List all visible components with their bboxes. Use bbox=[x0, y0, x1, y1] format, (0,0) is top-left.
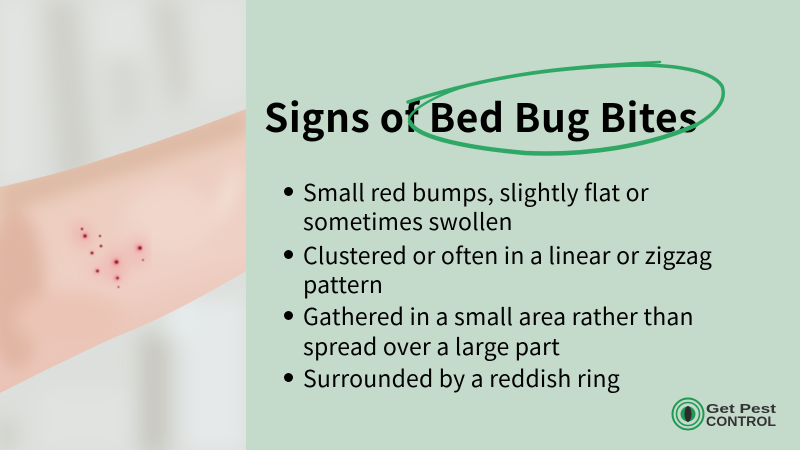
bullet 1 bbox=[284, 187, 293, 196]
title: Signs of Bed Bug Bites bbox=[264, 88, 698, 144]
logo text: CONTROL bbox=[706, 414, 776, 429]
logo: Get Pest Control bbox=[672, 398, 777, 430]
bullet 2 bbox=[284, 250, 293, 259]
bullet 2 text: Clustered or often in a linear or zigzag bbox=[303, 237, 712, 271]
bullet list bbox=[284, 174, 712, 394]
bullet 3 text continued: spread over a large part bbox=[303, 328, 560, 362]
hand-drawn green ellipse around title bbox=[406, 60, 726, 156]
logo text bbox=[706, 401, 777, 429]
arm bbox=[0, 109, 246, 393]
bullet 4 bbox=[284, 373, 293, 382]
bullet 4 text: Surrounded by a reddish ring bbox=[303, 360, 620, 394]
bullet 3 text: Gathered in a small area rather than bbox=[303, 298, 694, 332]
icon: target with bug bbox=[672, 398, 704, 430]
bullet 2 text continued: pattern bbox=[303, 266, 383, 300]
logo text: Get Pest bbox=[706, 401, 777, 416]
bullet 1 text continued: sometimes swollen bbox=[303, 203, 513, 237]
photo: arm with bed bug bites on white sheets bbox=[0, 0, 246, 450]
bullet 1 text: Small red bumps, slightly flat or bbox=[303, 174, 649, 208]
bullet 3 bbox=[284, 311, 293, 320]
